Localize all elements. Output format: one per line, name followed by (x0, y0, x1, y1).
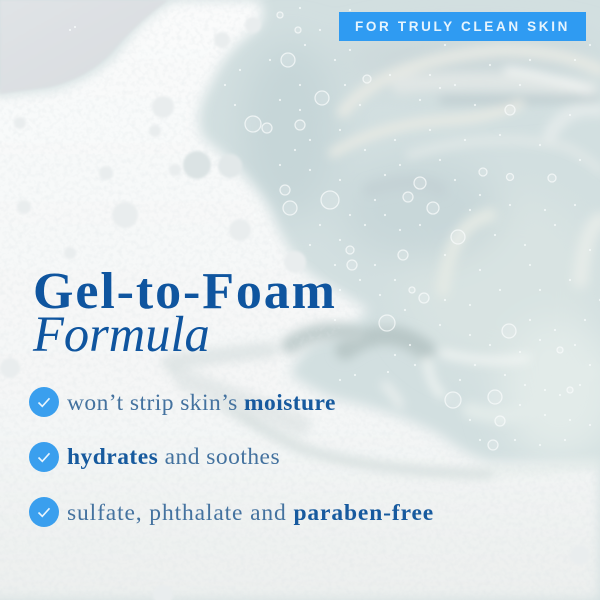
gel folds (333, 50, 600, 415)
foam texture (37, 37, 279, 275)
benefit: hydrates (29, 442, 280, 472)
title: Gel-to-Foam (33, 263, 337, 320)
icon: check (29, 387, 59, 417)
badge: for truly clean skin: FOR TRULY CLEAN SKIN (355, 19, 570, 34)
icon: check (29, 497, 59, 527)
text: sulfate, phthalate and paraben-free (67, 500, 434, 526)
large bubbles (245, 12, 573, 450)
tiny bubbles (70, 8, 600, 445)
foam grey swooshes (165, 332, 600, 474)
text: won’t strip skin’s moisture (67, 390, 336, 416)
text: hydrates and soothes (67, 444, 280, 470)
badge: for truly clean skin (339, 12, 586, 41)
benefit: moisture (29, 387, 336, 417)
icon: check (29, 442, 59, 472)
benefit: free from (29, 497, 434, 527)
top-left smooth gel (0, 0, 168, 94)
title (32, 263, 337, 362)
title: Formula (33, 306, 210, 362)
